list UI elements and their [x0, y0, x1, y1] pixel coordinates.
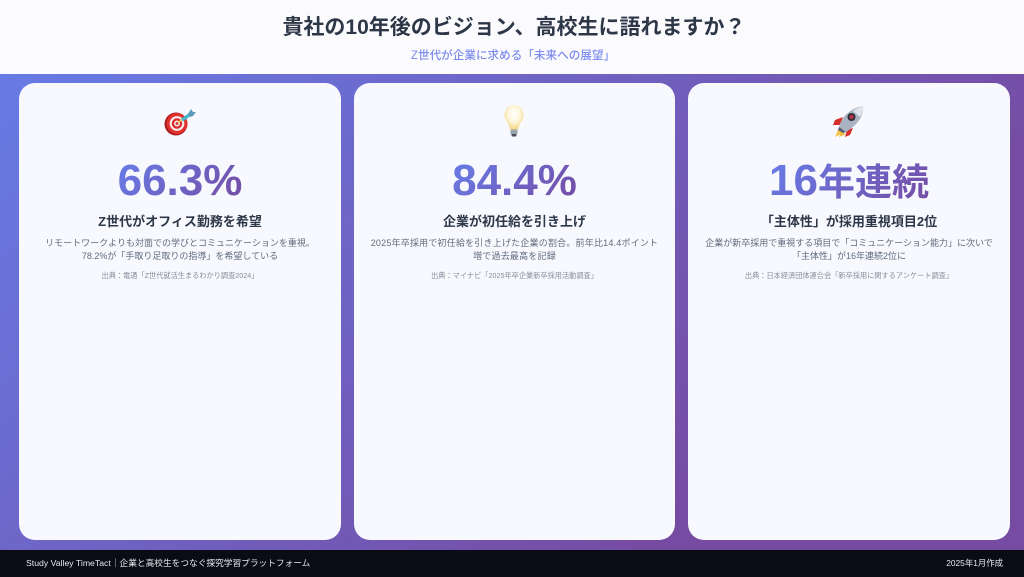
big stat: 16年連続 — [769, 156, 929, 205]
description: 企業が新卒採用で重視する項目で「コミュニケーション能力」に次いで — [705, 238, 993, 248]
description — [371, 238, 658, 261]
description — [45, 238, 315, 261]
big stat: 66.3% — [118, 156, 242, 205]
footer left text: Study Valley TimeTact｜企業と高校生をつなぐ探究学習プラットフォーム — [26, 558, 310, 568]
source: 出典：マイナビ「2025年卒企業新卒採用活動調査」 — [431, 271, 598, 280]
description: 78.2%が「手取り足取りの指導」を希望している — [82, 251, 278, 261]
panel: initiative card — [688, 83, 1010, 540]
icon: rocket — [833, 106, 864, 137]
description: 「主体性」が16年連続2位に — [792, 251, 906, 261]
title: 貴社の10年後のビジョン、高校生に語れますか？ — [282, 16, 746, 39]
header band — [0, 0, 1024, 74]
source: 出典：電通「Z世代就活生まるわかり調査2024」 — [102, 271, 258, 280]
icon: target with dart — [164, 109, 196, 136]
footer date: 2025年1月作成 — [946, 558, 1003, 568]
footer bar — [0, 550, 1024, 577]
panel: starting salary card — [354, 83, 675, 540]
description: 2025年卒採用で初任給を引き上げた企業の割合。前年比14.4ポイント — [371, 238, 658, 248]
card heading: 企業が初任給を引き上げ — [443, 214, 586, 229]
panel: office work card — [19, 83, 341, 540]
description — [705, 238, 993, 261]
icon: light bulb — [504, 105, 524, 136]
card heading: Z世代がオフィス勤務を希望 — [98, 214, 262, 229]
big stat: 84.4% — [452, 156, 577, 205]
subtitle: Z世代が企業に求める「未来への展望」 — [411, 49, 615, 62]
source: 出典：日本経済団体連合会「新卒採用に関するアンケート調査」 — [745, 271, 953, 280]
description: 増で過去最高を記録 — [473, 251, 556, 261]
description: リモートワークよりも対面での学びとコミュニケーションを重視。 — [45, 238, 315, 248]
card heading: 「主体性」が採用重視項目2位 — [761, 214, 937, 229]
